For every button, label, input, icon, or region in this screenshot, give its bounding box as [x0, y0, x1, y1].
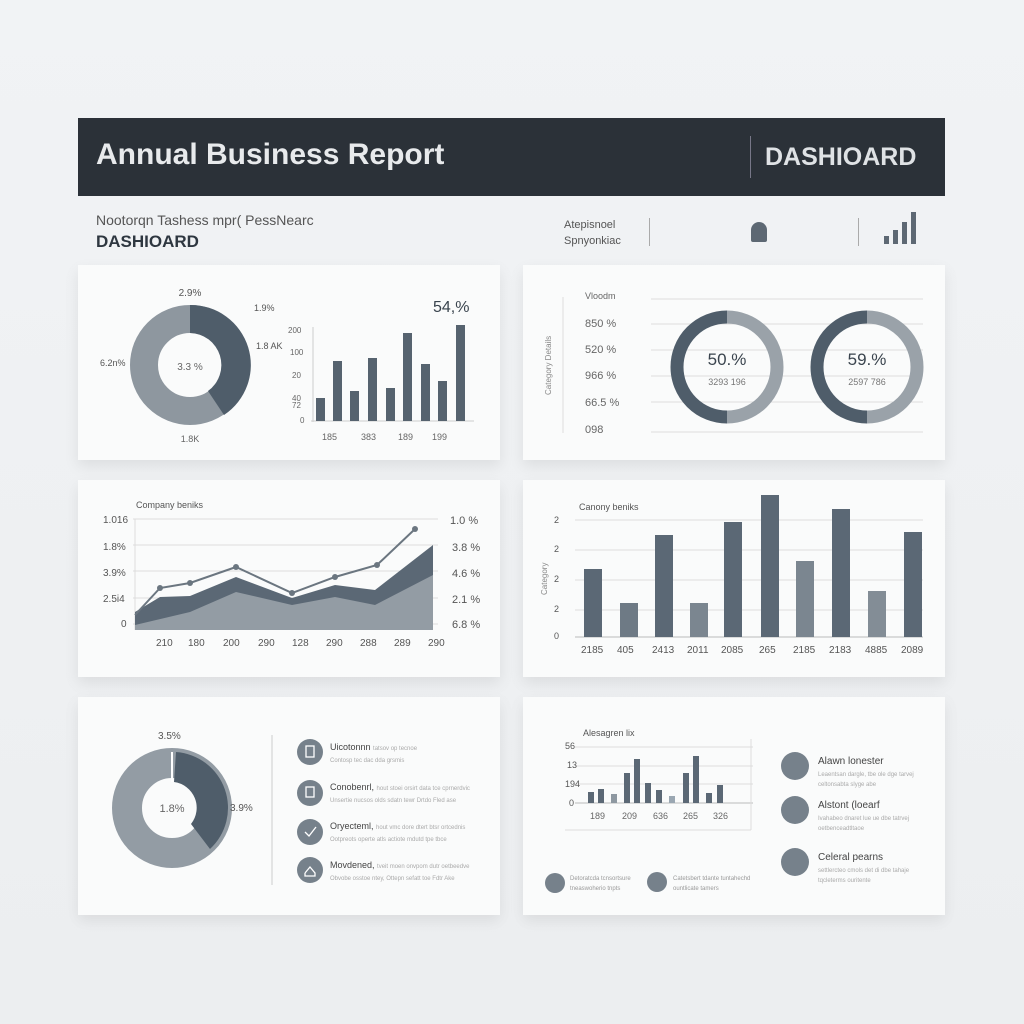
item list: settlercteo cmols det di dbe tahaje: [818, 868, 910, 874]
panel: small bars with items: 56: [565, 741, 575, 751]
item list: Alawn lonester: [818, 756, 884, 767]
panel: line/area chart: Company beniks: [136, 500, 204, 510]
user info: [564, 219, 621, 247]
panel: column chart: 2183: [829, 645, 852, 656]
bar chart: 0: [300, 416, 305, 425]
bottom items: ountlicate tamers: [673, 886, 719, 892]
bar chart: 40: [292, 394, 301, 403]
bottom items: tneaswoherio tnpts: [570, 886, 620, 892]
bar chart: [288, 299, 474, 442]
user info: Atepisnoel: [564, 219, 615, 231]
ring: 50%: [677, 317, 777, 417]
bar chart: 383: [361, 432, 376, 442]
list items: [297, 739, 470, 883]
panel: line/area chart: 290: [258, 638, 275, 649]
panel: line/area chart: 290: [428, 638, 445, 649]
panel: line/area chart: 3.9%: [103, 568, 126, 579]
donut chart: [100, 288, 283, 444]
panel: column chart: 265: [759, 645, 776, 656]
icon: signal bars: [884, 212, 916, 244]
panel: line/area chart: 180: [188, 638, 205, 649]
list items: Conobenrl, hout stoei orsirt data tce cprnerdvic: [330, 782, 470, 792]
header tag: DASHIOARD: [765, 143, 916, 171]
panel: column chart: 2: [554, 515, 559, 525]
donut chart: 3.3 %: [177, 362, 203, 373]
list items: Contosp tec dac dda grsmis: [330, 758, 404, 764]
donut chart: 1.9%: [254, 303, 275, 313]
panel: small bars with items: 189: [590, 811, 605, 821]
panel: line/area chart: 288: [360, 638, 377, 649]
panel: line/area chart: 2.5i4: [103, 594, 125, 605]
item list: [781, 752, 914, 884]
panel: small bars with items: 636: [653, 811, 668, 821]
bar chart: 100: [290, 348, 304, 357]
bar chart: 199: [432, 432, 447, 442]
icon: user: [751, 222, 767, 242]
panel: line/area chart: 1.016: [103, 515, 128, 526]
panel: column chart: 4885: [865, 645, 888, 656]
panel: small bars with items: 194: [565, 779, 580, 789]
bar chart: 20: [292, 371, 301, 380]
item list: Alstont (loearf: [818, 800, 880, 811]
bottom items: Detoratcda tcnsortsure: [570, 876, 631, 882]
y-axis labels: 66.5 %: [585, 397, 619, 409]
panel: donut and bars: [78, 265, 500, 460]
ring: 50%: 3293 196: [708, 377, 746, 387]
panel: line/area chart: [78, 480, 500, 677]
panel: column chart: Canony beniks: [579, 502, 639, 512]
panel: line/area chart: 200: [223, 638, 240, 649]
list items: Movdened, tveit moen onvpom dutr oetbeedve: [330, 860, 470, 870]
panel: small bars with items: 13: [567, 760, 577, 770]
subheader: DASHIOARD: [96, 232, 199, 251]
panel: column chart: 0: [554, 631, 559, 641]
donut chart: 6.2n%: [100, 358, 126, 368]
panel: column chart: [523, 480, 945, 677]
list items: Unsertie nucsos olds sdatn tewr Drtdo Fled ase: [330, 798, 457, 804]
panel: line/area chart: 3.8 %: [452, 542, 480, 554]
y-axis labels: 850 %: [585, 318, 616, 330]
panel: ring gauges: [523, 265, 945, 460]
panel: donut with list: [78, 697, 500, 915]
panel: line/area chart: 1.0 %: [450, 515, 478, 527]
panel: column chart: 2011: [687, 645, 709, 656]
panel: line/area chart: 290: [326, 638, 343, 649]
panel: line/area chart: 128: [292, 638, 309, 649]
panel: column chart: 405: [617, 645, 634, 656]
y-axis labels: 520 %: [585, 344, 616, 356]
list items: Ootpreots operte atls actiote mdutd tpe tbce: [330, 837, 447, 843]
item list: oetbenceadtltaoe: [818, 826, 865, 832]
panel: column chart: 2413: [652, 645, 675, 656]
panel: column chart: 2085: [721, 645, 744, 656]
user info: Spnyonkiac: [564, 235, 621, 247]
list items: Obvobe osstoe ntey, Ottepn sefatt toe Fdtr Ake: [330, 876, 455, 882]
y-axis labels: [585, 291, 619, 436]
bar chart: 189: [398, 432, 413, 442]
area chart: [135, 526, 433, 630]
donut chart: [127, 731, 253, 853]
donut chart: 1.8K: [181, 434, 199, 444]
header tag: [750, 136, 916, 178]
item list: celtonsabta slyge abe: [818, 782, 877, 788]
ring: 59%: 2597 786: [848, 377, 886, 387]
panel: small bars with items: 265: [683, 811, 698, 821]
donut chart: 1.8%: [159, 803, 185, 815]
panel: line/area chart: 289: [394, 638, 411, 649]
header bar: [78, 118, 945, 196]
item list: Ivahabeo dnaret lue ue dbe tatrvej: [818, 816, 909, 822]
panel: line/area chart: 210: [156, 638, 173, 649]
ring: 59%: 59.%: [848, 350, 886, 369]
bar chart: 200: [288, 326, 302, 335]
bottom items: [545, 872, 750, 893]
ring: 50%: 50.%: [708, 350, 746, 369]
donut chart: 3.9%: [230, 803, 253, 814]
panel: line/area chart: 2.1 %: [452, 594, 480, 606]
y-axis labels: Vloodm: [585, 291, 616, 301]
list items: Oryecteml, hout vmc dore dtert btsr ortcednis: [330, 821, 465, 831]
title: Annual Business Report: [96, 138, 444, 171]
item list: Celeral pearns: [818, 852, 883, 863]
panel: column chart: 2185: [793, 645, 816, 656]
list items: Uicotonnn tatsov op tecnoe: [330, 742, 418, 752]
panel: line/area chart: 4.6 %: [452, 568, 480, 580]
bottom items: Catetsbert tdante tuntahechd: [673, 876, 750, 882]
bar chart: 185: [322, 432, 337, 442]
panel: small bars with items: 326: [713, 811, 728, 821]
donut chart: 2.9%: [179, 288, 202, 299]
panel: ring gauges: Category Details: [544, 336, 553, 395]
panel: small bars with items: 0: [569, 798, 574, 808]
subheader: Nootorqn Tashess mpr( PessNearc: [96, 212, 314, 228]
panel: small bars with items: Alesagren lix: [583, 728, 635, 738]
bar chart: 54,%: [433, 299, 469, 316]
subheader: [96, 212, 916, 251]
panel: column chart: 2: [554, 604, 559, 614]
panel: column chart: 2089: [901, 645, 924, 656]
panel: line/area chart: 1.8%: [103, 542, 126, 553]
panel: small bars with items: 209: [622, 811, 637, 821]
donut chart: 3.5%: [158, 731, 181, 742]
panel: small bars with items: [523, 697, 945, 915]
item list: Leaentsan dargle, tbe ole dge tarvej: [818, 772, 914, 778]
panel: column chart: 2: [554, 544, 559, 554]
y-axis labels: 966 %: [585, 370, 616, 382]
panel: line/area chart: 6.8 %: [452, 619, 480, 631]
donut chart: 1.8 AK: [256, 341, 283, 351]
bar chart: 72: [292, 401, 301, 410]
panel: column chart: 2185: [581, 645, 604, 656]
ring: 59%: [817, 317, 917, 417]
panel: line/area chart: 0: [121, 619, 127, 630]
item list: tqcleterms ouritente: [818, 878, 871, 884]
y-axis labels: 098: [585, 424, 603, 436]
panel: column chart: 2: [554, 574, 559, 584]
panel: column chart: Category: [540, 563, 549, 595]
